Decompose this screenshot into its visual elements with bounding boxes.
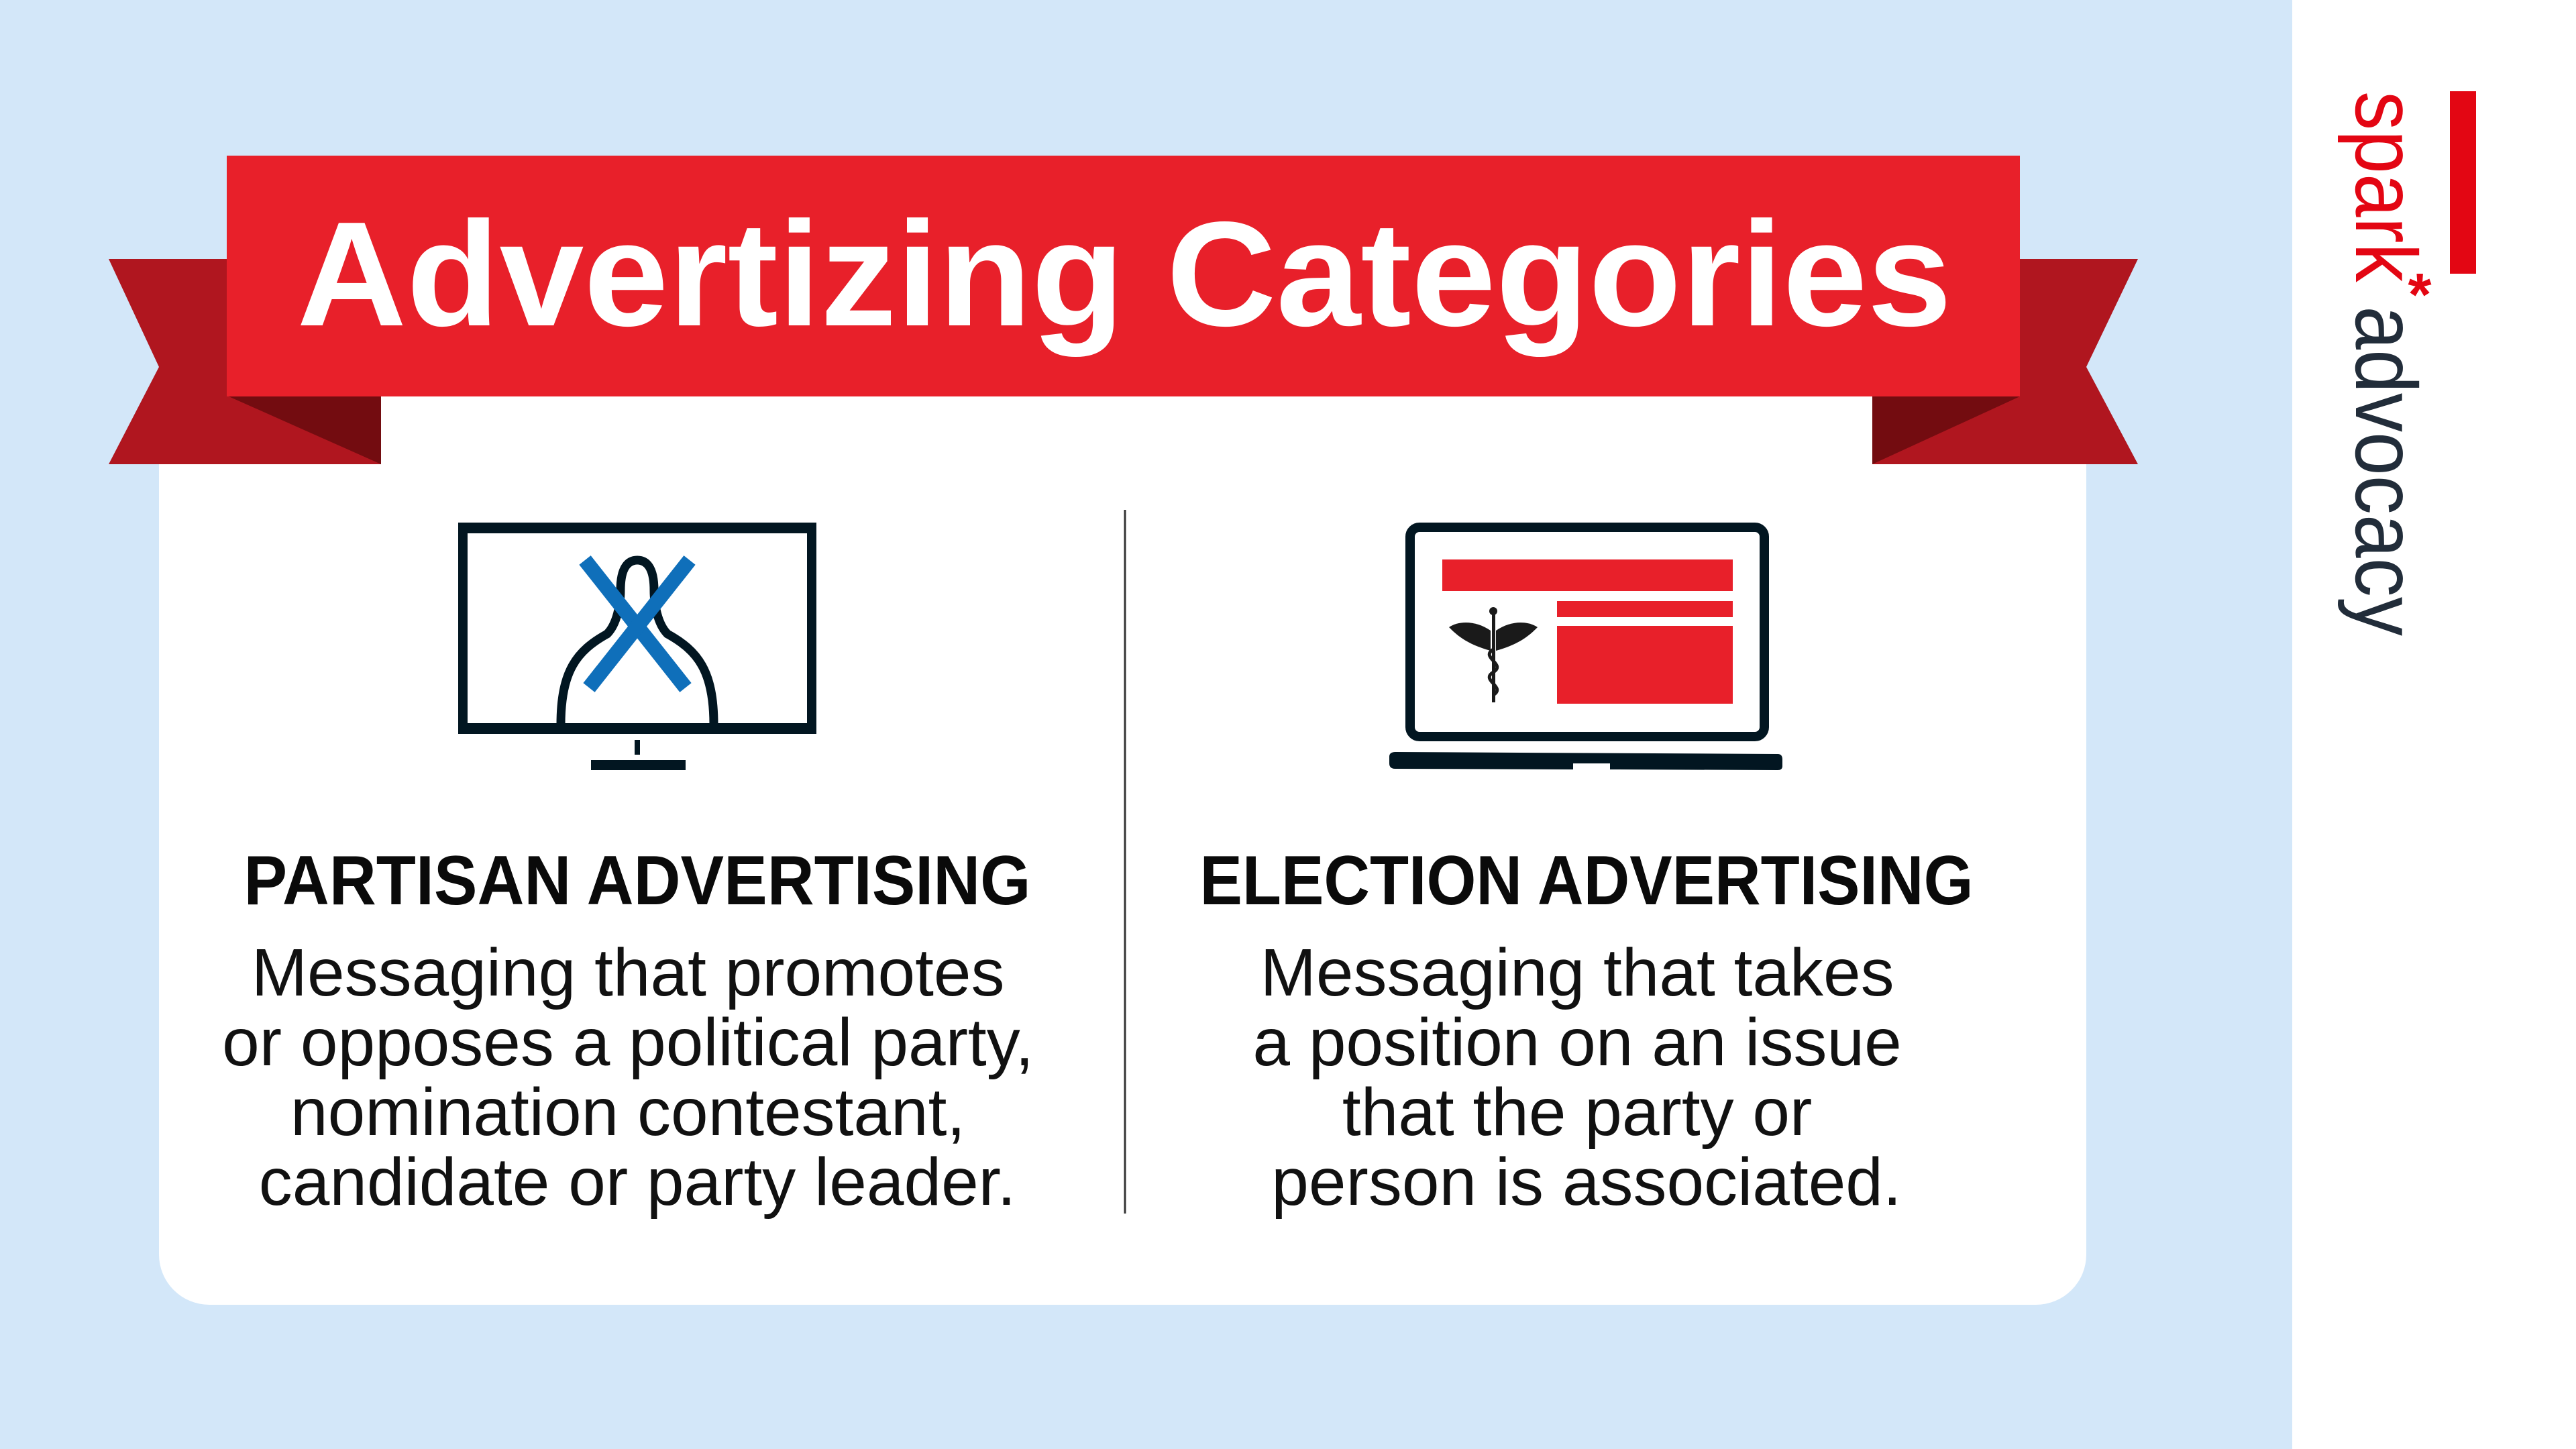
text block: partisan description: candidate or party leader.	[259, 1144, 1016, 1220]
caduceus	[1449, 607, 1538, 702]
heading: election advertising: ELECTION ADVERTISING	[1199, 842, 1974, 920]
text block: partisan description: or opposes a political party,	[222, 1005, 1034, 1080]
text block: partisan description: Messaging that promotes	[252, 935, 1005, 1010]
logo red bar	[2450, 91, 2476, 274]
icon: laptop with caduceus	[1389, 527, 1782, 770]
text block: election description: person is associated.	[1271, 1144, 1902, 1220]
text block: election description: a position on an issue	[1252, 1005, 1902, 1080]
heading: partisan advertising: PARTISAN ADVERTISING	[244, 842, 1030, 920]
text block: partisan description: nomination contestant,	[290, 1075, 965, 1150]
logo text: spark advocacy: *	[2408, 262, 2432, 329]
icon: monitor with crossed-out person	[458, 523, 816, 770]
card	[159, 396, 2086, 1305]
title: Advertizing Categories	[297, 191, 1952, 358]
text block: election description: that the party or	[1342, 1075, 1812, 1150]
logo text: spark advocacy: spark advocacy	[2337, 91, 2435, 636]
text block: election description: Messaging that takes	[1260, 935, 1894, 1010]
banner	[109, 156, 2138, 464]
logo panel	[2292, 0, 2576, 1449]
